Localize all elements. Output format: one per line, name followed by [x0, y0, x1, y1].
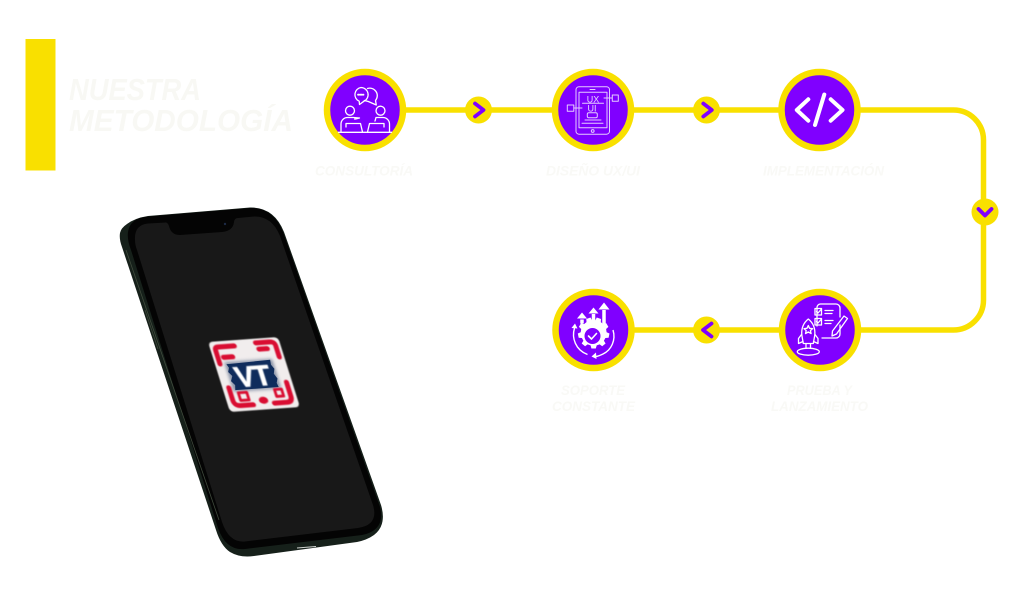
icon: rocket and checklist — [797, 304, 848, 355]
logo red dot — [258, 396, 269, 404]
icon: gear with growth arrows — [572, 302, 614, 359]
label: soporte constante: CONSTANTE — [552, 398, 636, 414]
step: prueba y lanzamiento — [782, 292, 858, 368]
step labels — [315, 162, 885, 414]
phone bezel — [128, 208, 381, 549]
logo text: VT — [231, 360, 276, 394]
camera dot — [224, 223, 226, 225]
title: METODOLOGÍA — [69, 103, 293, 138]
step: consultoria — [327, 72, 403, 148]
label: soporte constante — [552, 382, 636, 414]
label: diseno: DISEÑO UX/UI — [546, 162, 641, 178]
label: prueba y lanzamiento — [771, 382, 868, 414]
label: prueba y lanzamiento: LANZAMIENTO — [771, 398, 868, 414]
icon: two people talking — [338, 88, 392, 132]
logo red brackets — [214, 342, 293, 406]
step: diseno ux/ui — [555, 72, 631, 148]
label: implementacion: IMPLEMENTACIÓN — [763, 162, 885, 178]
icon: code brackets — [797, 94, 842, 125]
charging port — [297, 546, 316, 548]
title: NUESTRA — [69, 72, 201, 107]
accent bar — [26, 39, 56, 170]
icon label: UI: UI — [588, 104, 596, 114]
label: soporte constante: SOPORTE — [561, 382, 626, 398]
logo navy glow — [224, 359, 281, 392]
label: consultoria: CONSULTORÍA — [315, 162, 413, 178]
arrow: implementacion to prueba — [972, 198, 998, 226]
phone screen — [135, 216, 374, 542]
icon: tablet wireframe — [567, 87, 618, 134]
arrow: consultoria to diseno — [465, 96, 492, 124]
arrow: prueba to soporte — [693, 316, 720, 344]
side detail lines — [126, 250, 219, 520]
title — [69, 72, 293, 138]
step: implementacion — [782, 72, 858, 148]
process connector line — [365, 110, 984, 330]
icon label: UX: UX — [587, 94, 599, 104]
arrow: diseno to implementacion — [693, 96, 720, 124]
app logo — [208, 337, 300, 412]
phone frame — [120, 207, 383, 557]
logo tile — [208, 337, 300, 412]
label: prueba y lanzamiento: PRUEBA Y — [787, 382, 854, 398]
phone mockup — [120, 207, 383, 557]
step: soporte constante — [556, 292, 632, 368]
logo navy plate — [225, 360, 280, 390]
